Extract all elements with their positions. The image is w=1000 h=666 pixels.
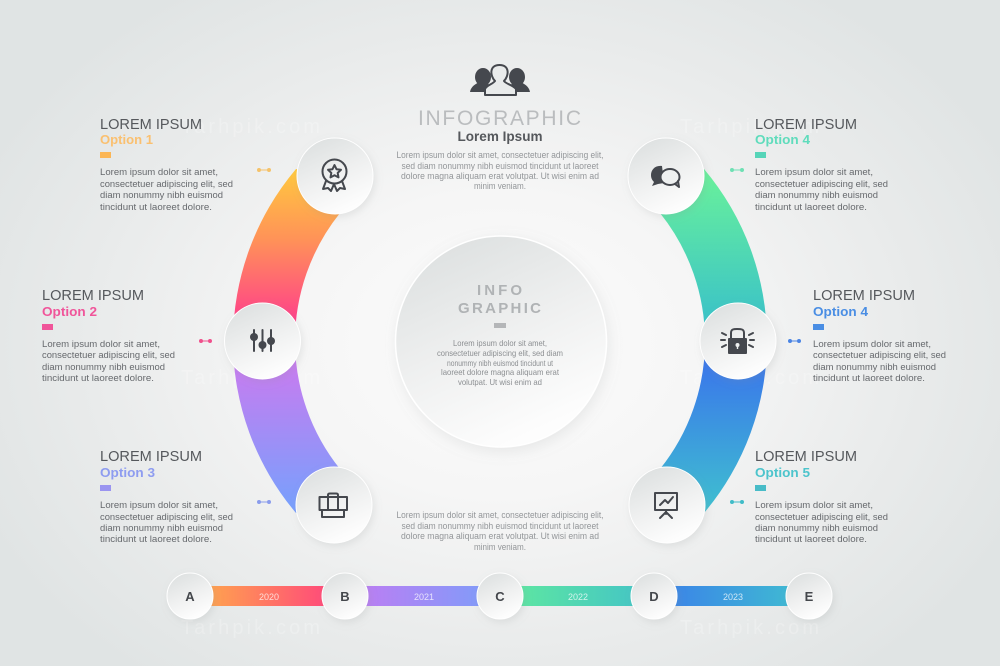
disc text: volutpat. Ut wisi enim ad bbox=[458, 377, 542, 387]
segment 2021 bbox=[345, 586, 500, 606]
text block: option 1 bbox=[100, 116, 233, 212]
node: lock bbox=[700, 303, 776, 379]
text block: option 4: consectetuer adipiscing elit, sed bbox=[755, 179, 888, 189]
bottom paragraph: dolore magna aliquam erat volutpat. Ut wisi enim ad bbox=[401, 531, 599, 541]
marker E bbox=[786, 573, 832, 619]
text block: option 3: tincidunt ut laoreet dolore. bbox=[100, 534, 212, 544]
text block: option 4: Lorem ipsum dolor sit amet, bbox=[755, 167, 873, 177]
icon: briefcase bbox=[320, 494, 347, 517]
icon: sliders bbox=[250, 330, 275, 351]
node: sliders bbox=[224, 303, 300, 379]
top paragraph: minim veniam. bbox=[474, 181, 526, 191]
text block: option 4: LOREM IPSUM bbox=[755, 116, 857, 133]
connector: option 1 bbox=[258, 168, 270, 172]
node: chat bbox=[628, 138, 704, 214]
connector: option 3 bbox=[258, 500, 270, 504]
icon: chat bubbles bbox=[651, 166, 680, 187]
text block: option 3: Option 3 bbox=[100, 465, 155, 480]
disc text bbox=[437, 338, 563, 387]
disc bar bbox=[494, 323, 506, 328]
disc heading: GRAPHIC bbox=[458, 300, 541, 317]
bottom paragraph: sed diam nonummy nibh euismod tincidunt ut laoreet bbox=[402, 521, 599, 531]
text block: option 1: Lorem ipsum dolor sit amet, bbox=[100, 167, 218, 177]
text block: option 2: LOREM IPSUM bbox=[42, 287, 144, 304]
disc text: nonummy nibh euismod tincidunt ut bbox=[447, 358, 554, 368]
text block: option 5: diam nonummy nibh euismod bbox=[755, 523, 878, 533]
text block: option 4 lower: Lorem ipsum dolor sit amet, bbox=[813, 339, 931, 349]
text block: option 3: LOREM IPSUM bbox=[100, 448, 202, 465]
text block: option 3 bbox=[100, 448, 233, 544]
text block: option 4: tincidunt ut laoreet dolore. bbox=[755, 202, 867, 212]
disc text: laoreet dolore magna aliquam erat bbox=[441, 367, 560, 377]
disc text: consectetuer adipiscing elit, sed diam bbox=[437, 348, 563, 358]
text block: option 2: Lorem ipsum dolor sit amet, bbox=[42, 339, 160, 349]
text block: option 4: diam nonummy nibh euismod bbox=[755, 190, 878, 200]
text block: option 5 bbox=[755, 448, 888, 544]
text block: option 5: tincidunt ut laoreet dolore. bbox=[755, 534, 867, 544]
text block: option 4: Option 4 bbox=[755, 132, 811, 147]
top paragraph: dolore magna aliquam erat volutpat. Ut wisi enim ad bbox=[401, 171, 599, 181]
arc segment: green to teal bbox=[660, 169, 767, 341]
watermarks: Tarhpik.com bbox=[680, 617, 819, 639]
text block: option 5: consectetuer adipiscing elit, sed bbox=[755, 512, 888, 522]
text block: option 5: LOREM IPSUM bbox=[755, 448, 857, 465]
text block: option 4 lower: tincidunt ut laoreet dolore. bbox=[813, 373, 925, 383]
top icon: people bbox=[470, 65, 530, 95]
bottom paragraph: minim veniam. bbox=[474, 542, 526, 552]
connector: option 5 bbox=[730, 500, 744, 504]
segment 2021: 2021 bbox=[414, 592, 434, 602]
text block: option 4 lower: Option 4 bbox=[813, 304, 869, 319]
text block: option 1: consectetuer adipiscing elit, sed bbox=[100, 179, 233, 189]
arc segment: blue to cyan bbox=[660, 341, 767, 513]
text block: option 1: tincidunt ut laoreet dolore. bbox=[100, 202, 212, 212]
watermarks: Tarhpik.com bbox=[181, 116, 320, 138]
marker B: B bbox=[340, 589, 350, 604]
bottom paragraph bbox=[396, 510, 604, 552]
marker D: D bbox=[649, 589, 659, 604]
node: award bbox=[297, 138, 373, 214]
watermarks bbox=[181, 116, 819, 639]
marker A: A bbox=[185, 589, 195, 604]
marker E: E bbox=[805, 589, 814, 604]
bottom paragraph: Lorem ipsum dolor sit amet, consectetuer adipiscing elit, bbox=[396, 510, 604, 520]
text block: option 3: consectetuer adipiscing elit, sed bbox=[100, 512, 233, 522]
connector: option 4 lower bbox=[788, 340, 800, 342]
segment 2023: 2023 bbox=[723, 592, 743, 602]
watermarks: Tarhpik.com bbox=[680, 367, 819, 389]
text block: option 5: Lorem ipsum dolor sit amet, bbox=[755, 500, 873, 510]
text block: option 5: Option 5 bbox=[755, 465, 810, 480]
watermarks: Tarhpik.com bbox=[181, 367, 320, 389]
text block: option 2: Option 2 bbox=[42, 304, 97, 319]
top paragraph: sed diam nonummy nibh euismod tincidunt ut laoreet bbox=[402, 161, 599, 171]
text block: option 2: tincidunt ut laoreet dolore. bbox=[42, 373, 154, 383]
segment 2022 bbox=[500, 586, 654, 606]
segment 2020: 2020 bbox=[259, 592, 279, 602]
text block: option 4 bbox=[755, 116, 888, 212]
icon: unlocked padlock bbox=[721, 329, 754, 354]
node: chart bbox=[629, 467, 705, 543]
text block: option 4 lower bbox=[813, 287, 946, 383]
watermarks: Tarhpik.com bbox=[680, 116, 819, 138]
icon: presentation board bbox=[655, 493, 677, 518]
watermarks: Tarhpik.com bbox=[181, 617, 320, 639]
segment 2023 bbox=[654, 586, 809, 606]
marker B bbox=[322, 573, 368, 619]
text block: option 4 lower: diam nonummy nibh euismod bbox=[813, 362, 936, 372]
text block: option 2: diam nonummy nibh euismod bbox=[42, 362, 165, 372]
timeline bbox=[167, 573, 832, 619]
arc segment: orange to pink bbox=[233, 169, 340, 341]
arc segment: purple to blue bbox=[233, 341, 340, 513]
text block: option 1: LOREM IPSUM bbox=[100, 116, 202, 133]
text block: option 2 bbox=[42, 287, 175, 383]
text block: option 1: Option 1 bbox=[100, 132, 153, 147]
disc heading bbox=[458, 282, 541, 317]
connector: option 4 bbox=[730, 168, 744, 172]
connector: option 2 bbox=[200, 340, 212, 342]
main title: INFOGRAPHIC bbox=[418, 107, 581, 130]
text block: option 1: diam nonummy nibh euismod bbox=[100, 190, 223, 200]
text block: option 4 lower: consectetuer adipiscing elit, sed bbox=[813, 350, 946, 360]
segment 2022: 2022 bbox=[568, 592, 588, 602]
center disc bbox=[396, 236, 606, 447]
top paragraph bbox=[396, 150, 604, 191]
top paragraph: Lorem ipsum dolor sit amet, consectetuer adipiscing elit, bbox=[396, 150, 604, 160]
subtitle: Lorem Ipsum bbox=[458, 128, 542, 144]
marker C bbox=[477, 573, 523, 619]
marker D bbox=[631, 573, 677, 619]
segment 2020 bbox=[190, 586, 345, 606]
text block: option 3: Lorem ipsum dolor sit amet, bbox=[100, 500, 218, 510]
text block: option 4 lower: LOREM IPSUM bbox=[813, 287, 915, 304]
text block: option 3: diam nonummy nibh euismod bbox=[100, 523, 223, 533]
node: briefcase bbox=[296, 467, 372, 543]
disc text: Lorem ipsum dolor sit amet, bbox=[453, 338, 547, 348]
icon: award ribbon bbox=[322, 160, 346, 191]
disc heading: INFO bbox=[477, 282, 522, 299]
marker C: C bbox=[495, 589, 505, 604]
text block: option 2: consectetuer adipiscing elit, sed bbox=[42, 350, 175, 360]
marker A bbox=[167, 573, 213, 619]
